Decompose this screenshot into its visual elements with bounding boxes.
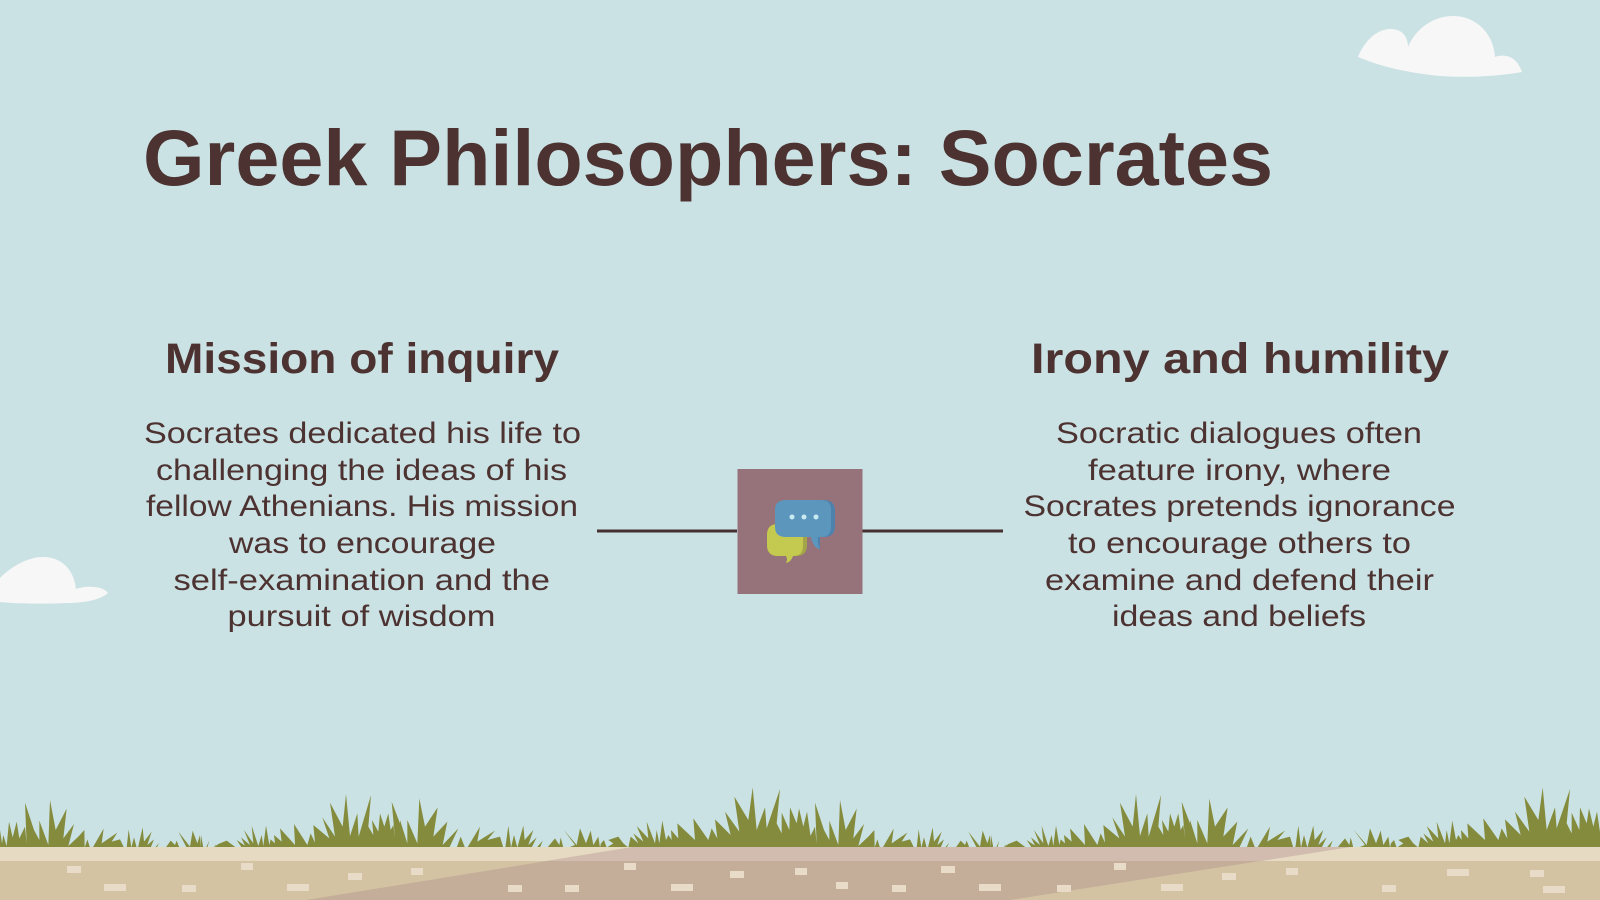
icon: chat bubbles on square <box>738 469 862 594</box>
panel: mission of inquiry <box>144 335 581 633</box>
cloud: left <box>0 557 108 604</box>
text block: mission of inquiry: challenging the ideas of his <box>156 454 567 487</box>
text block: irony and humility <box>1024 417 1456 633</box>
text block: irony and humility: Socratic dialogues often <box>1056 417 1422 450</box>
cloud: top right <box>1358 16 1522 77</box>
heading: irony and humility: Irony and humility <box>1031 335 1449 383</box>
grass <box>0 787 1600 848</box>
ground: path with stones <box>0 847 1600 900</box>
connector: left line <box>597 530 737 532</box>
text block: mission of inquiry: self-examination and the <box>174 564 550 597</box>
title: Greek Philosophers: Socrates <box>143 113 1273 202</box>
text block: irony and humility: feature irony, where <box>1088 454 1391 487</box>
text block: irony and humility: to encourage others to <box>1068 527 1411 560</box>
heading: mission of inquiry: Mission of inquiry <box>165 335 559 383</box>
connector: right line <box>862 530 1003 532</box>
panel: irony and humility <box>1024 335 1456 633</box>
text block: irony and humility: Socrates pretends ignorance <box>1024 490 1456 523</box>
text block: mission of inquiry: was to encourage <box>228 527 496 560</box>
text block: irony and humility: ideas and beliefs <box>1112 600 1366 633</box>
text block: mission of inquiry: pursuit of wisdom <box>228 600 496 633</box>
text block: mission of inquiry <box>144 417 581 633</box>
text block: irony and humility: examine and defend their <box>1045 564 1434 597</box>
text block: mission of inquiry: Socrates dedicated his life to <box>144 417 581 450</box>
text block: mission of inquiry: fellow Athenians. His mission <box>146 490 578 523</box>
